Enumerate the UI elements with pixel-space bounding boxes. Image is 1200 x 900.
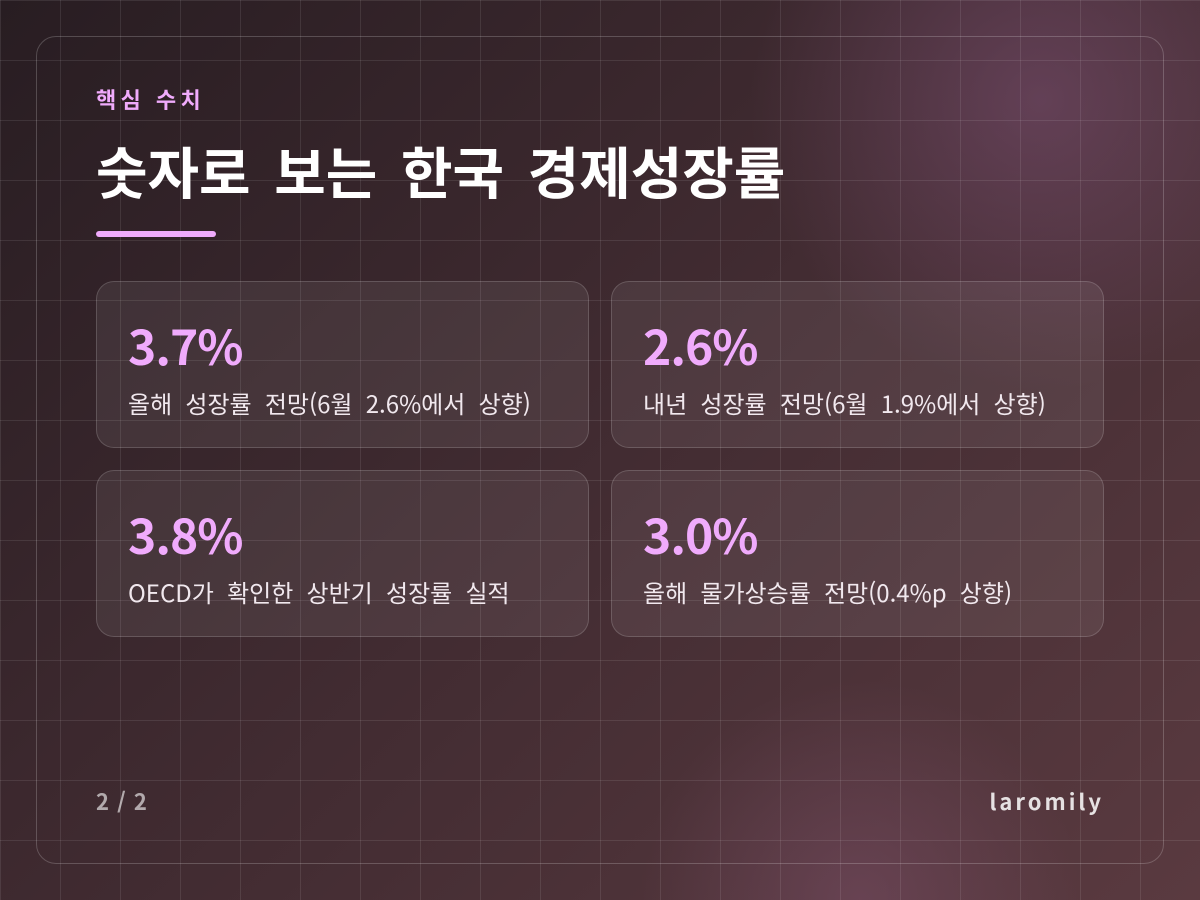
label: 내년 성장률 전망(6월 1.9%에서 상향) bbox=[643, 385, 1046, 420]
label: 올해 물가상승률 전망(0.4%p 상향) bbox=[643, 574, 1012, 609]
value: 3.0% bbox=[643, 498, 758, 568]
value: 3.8% bbox=[128, 498, 243, 568]
page number: 2 / 2 bbox=[96, 785, 148, 817]
title underline bbox=[96, 231, 216, 237]
card: 3.0% bbox=[611, 470, 1104, 637]
eyebrow: 핵심 수치 bbox=[96, 83, 205, 115]
label: OECD가 확인한 상반기 성장률 실적 bbox=[128, 574, 510, 609]
title: 숫자로 보는 한국 경제성장률 bbox=[96, 130, 785, 211]
value: 3.7% bbox=[128, 309, 243, 379]
label: 올해 성장률 전망(6월 2.6%에서 상향) bbox=[128, 385, 531, 420]
card: 2.6% bbox=[611, 281, 1104, 448]
card: 3.8% bbox=[96, 470, 589, 637]
card: 3.7% bbox=[96, 281, 589, 448]
value: 2.6% bbox=[643, 309, 758, 379]
brand: laromily bbox=[990, 785, 1104, 817]
